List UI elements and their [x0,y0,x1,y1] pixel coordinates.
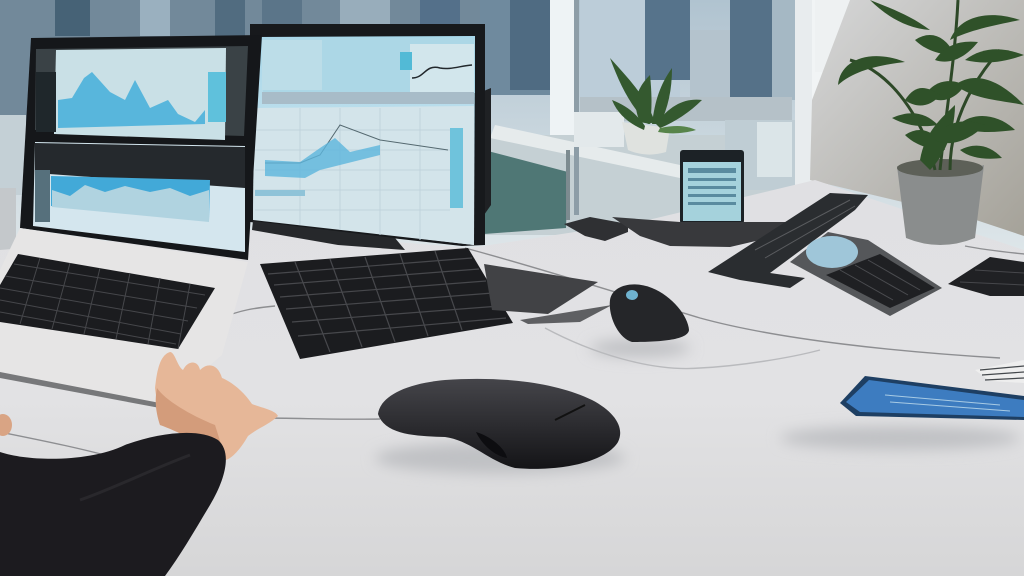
tablet lying on desk right [840,360,1024,420]
white desk surface [0,180,1024,576]
compact keyboard with round pad [790,232,942,316]
cables [0,246,1024,462]
laptop base and keyboard [0,228,248,408]
plant on back table [610,58,702,155]
desk shadows [375,339,1020,474]
dark items behind on the desk [564,217,790,247]
tablet on stand [680,150,744,224]
notepad [484,264,612,324]
person's dark sleeve [0,433,226,576]
window background with city view [0,0,1024,260]
monitor stand base [252,221,405,250]
laptop screen [20,35,262,260]
hand on laptop [0,352,278,460]
far right keyboard [948,257,1024,296]
right monitor [250,24,491,246]
large black mouse [378,379,620,469]
black keyboard [260,248,513,359]
plant in grey pot [838,0,1024,245]
right black stand and tablet [708,193,868,288]
small dark mouse [610,284,689,342]
